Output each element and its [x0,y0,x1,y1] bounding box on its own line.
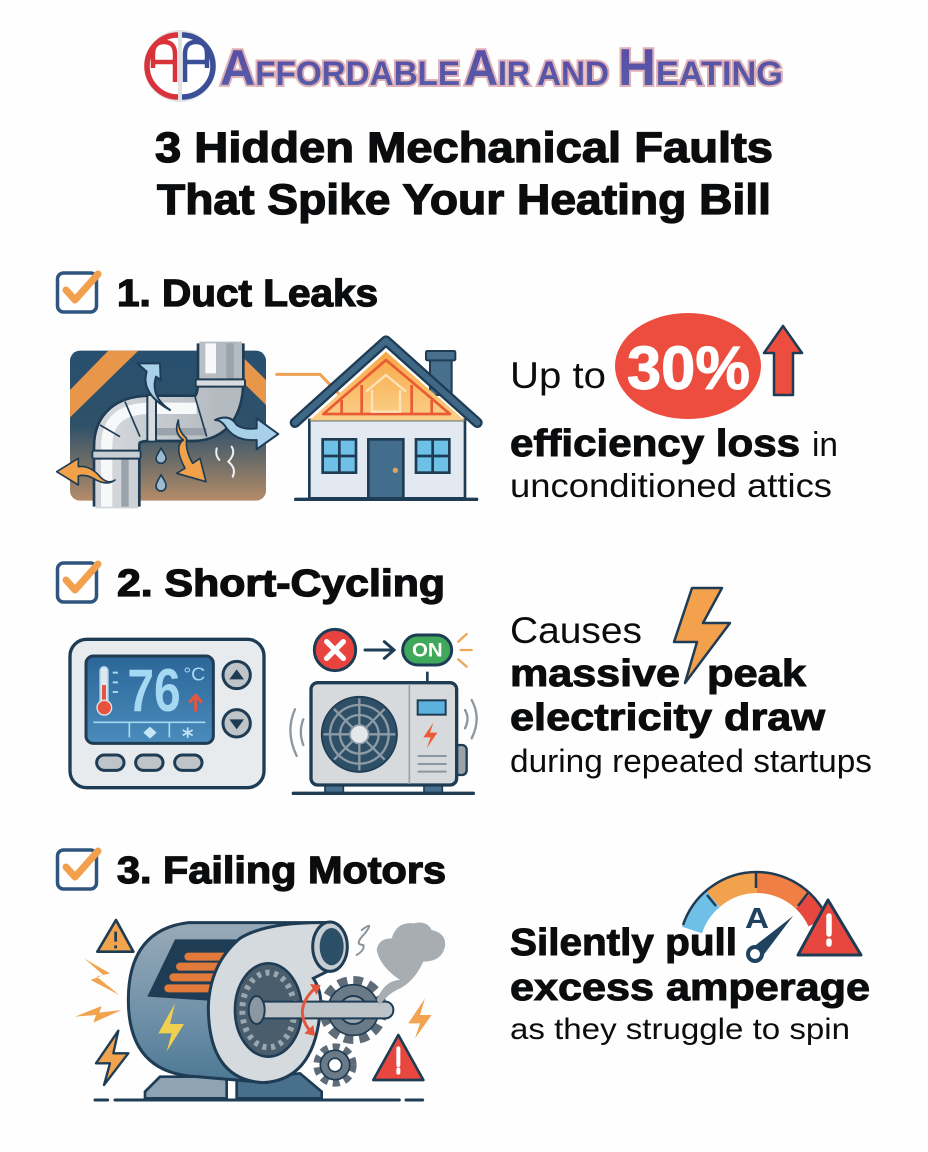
stat: 30 percent: Up to [510,355,606,396]
illustration: thermostat: °C [183,664,205,685]
text: silently pull excess amperage: excess amperage [510,967,870,1009]
text: silently pull excess amperage: as they struggle to spin [510,1013,850,1046]
icon: logo emblem [144,30,216,102]
title: That Spike Your Heating Bill [157,176,771,224]
badge: on [403,635,452,665]
illustration: failing motor [75,920,445,1100]
icon: off symbol [314,629,356,671]
smoke [377,922,445,1005]
title: 3 Hidden Mechanical Faults [155,124,773,172]
heading: duct leaks: 1. Duct Leaks [117,273,378,315]
panel: duct leaks [57,273,838,508]
gears [318,981,383,1082]
logo [144,30,783,102]
logo wordmark: AND [537,55,609,93]
arrow: heat escaping left [57,458,115,485]
illustration: house with attic [277,341,477,499]
logo wordmark [220,39,783,97]
text: massive peak electricity draw: massive [510,653,680,695]
text: massive peak electricity draw [510,653,872,779]
text: massive peak electricity draw: peak [707,653,807,695]
text: silently pull excess amperage: Silently pull [510,922,737,964]
text: efficiency loss: in [812,426,838,464]
logo wordmark: HEATING [618,39,783,97]
icon: checkbox 2 [58,563,98,602]
heading: short-cycling: 2. Short-Cycling [117,563,445,605]
text: massive peak electricity draw: electricity draw [510,697,826,739]
logo wordmark: AIR [464,40,530,96]
icon: lightning bolt [674,588,730,683]
arrow: heat escaping down [177,420,206,482]
volute [208,923,327,1083]
arrow: off to on [365,642,394,658]
icon: checkbox 1 [58,273,98,312]
icon: warning red [373,1035,423,1080]
motor housing [128,923,327,1083]
illustration: thermostat [70,639,264,788]
heading: failing motors: 3. Failing Motors [117,850,446,892]
illustration: leaking duct [57,342,278,508]
arrow: rotation [302,986,317,1034]
text: silently pull excess amperage [510,922,870,1046]
icon: amperage gauge: A [745,903,769,935]
panel: failing motors [58,850,870,1100]
text: efficiency loss: unconditioned attics [510,467,832,504]
shaft [255,1002,393,1018]
arrow: air escaping up [137,363,170,410]
title [155,124,773,224]
icon: checkbox 3 [58,850,98,889]
icon: bolt dark outline [96,1031,128,1085]
logo wordmark: AFFORDABLE [220,40,460,96]
icon: warning triangle [798,900,861,955]
text: massive peak electricity draw: during repeated startups [510,743,872,779]
illustration: thermostat: 76 [127,657,181,724]
text: efficiency loss: efficiency loss [510,423,800,465]
text: efficiency loss [510,423,838,504]
icon: warning orange [97,920,133,952]
arrow: air escaping right [215,418,278,449]
panel: short cycling [58,563,872,793]
badge: 30%: 30% [627,334,750,402]
badge: 30% [615,313,761,419]
icon: amperage gauge [683,872,861,961]
badge: on: ON [412,641,443,662]
text: causes: Causes [510,610,642,651]
illustration: outdoor unit cycling [290,629,477,793]
stat: 30 percent [510,313,802,419]
arrow: up [764,326,802,395]
